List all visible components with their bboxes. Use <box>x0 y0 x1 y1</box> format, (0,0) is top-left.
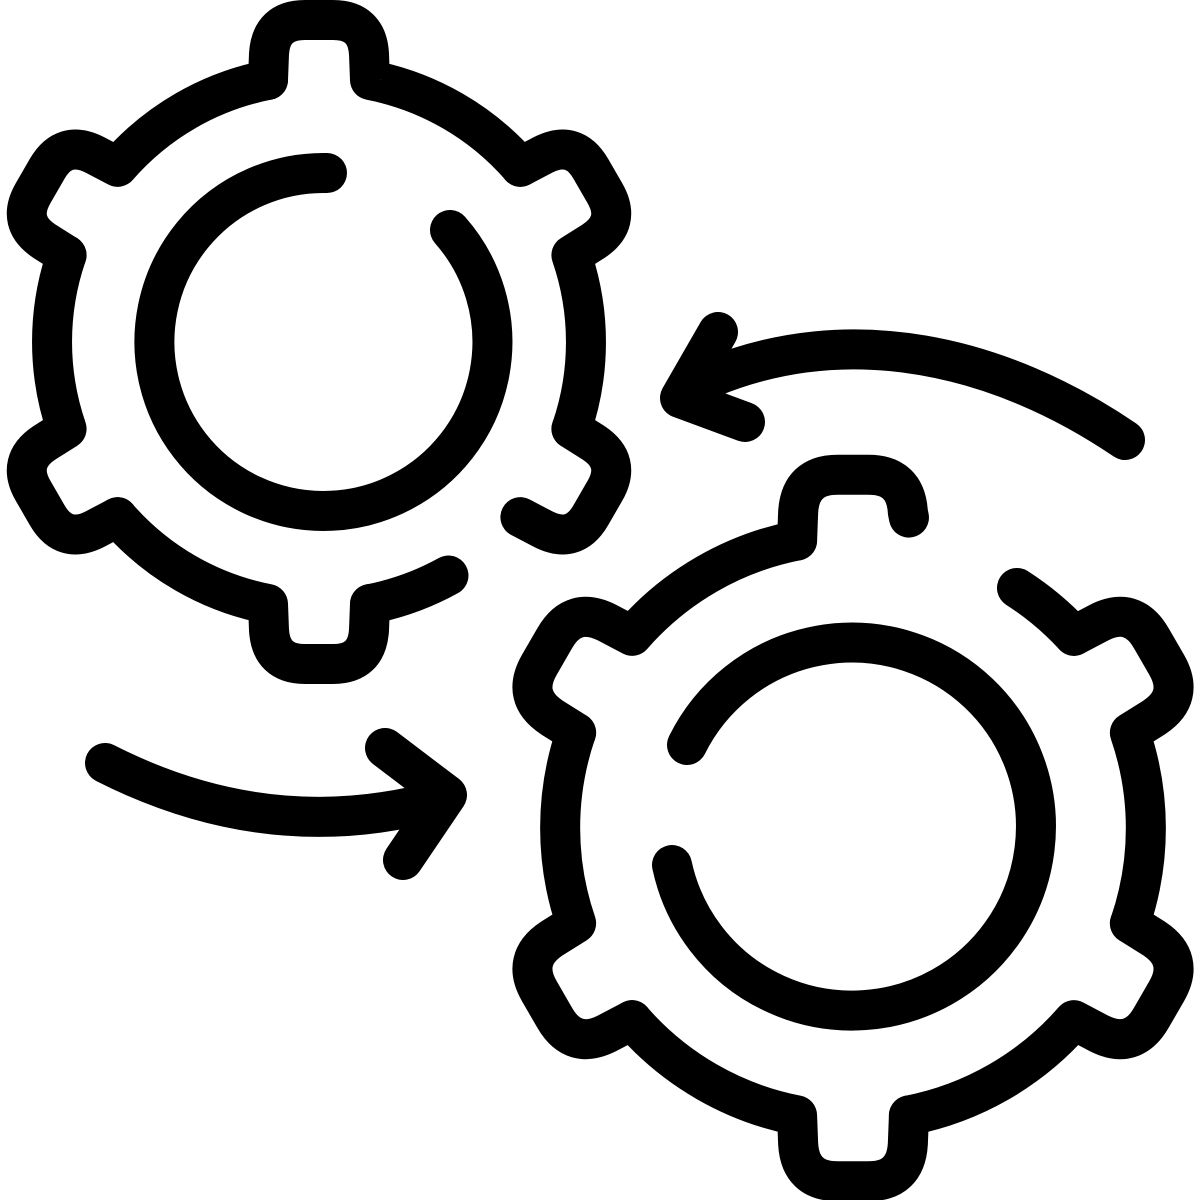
gear: top left <box>0 6 699 678</box>
gear: bottom right <box>437 460 1200 1196</box>
arrow: bottom left curved arrow <box>105 748 447 860</box>
gear: bottom right inner ring <box>672 643 1036 1011</box>
arrow: top right curved arrow <box>680 332 1125 440</box>
gear: top left inner ring <box>154 173 492 511</box>
